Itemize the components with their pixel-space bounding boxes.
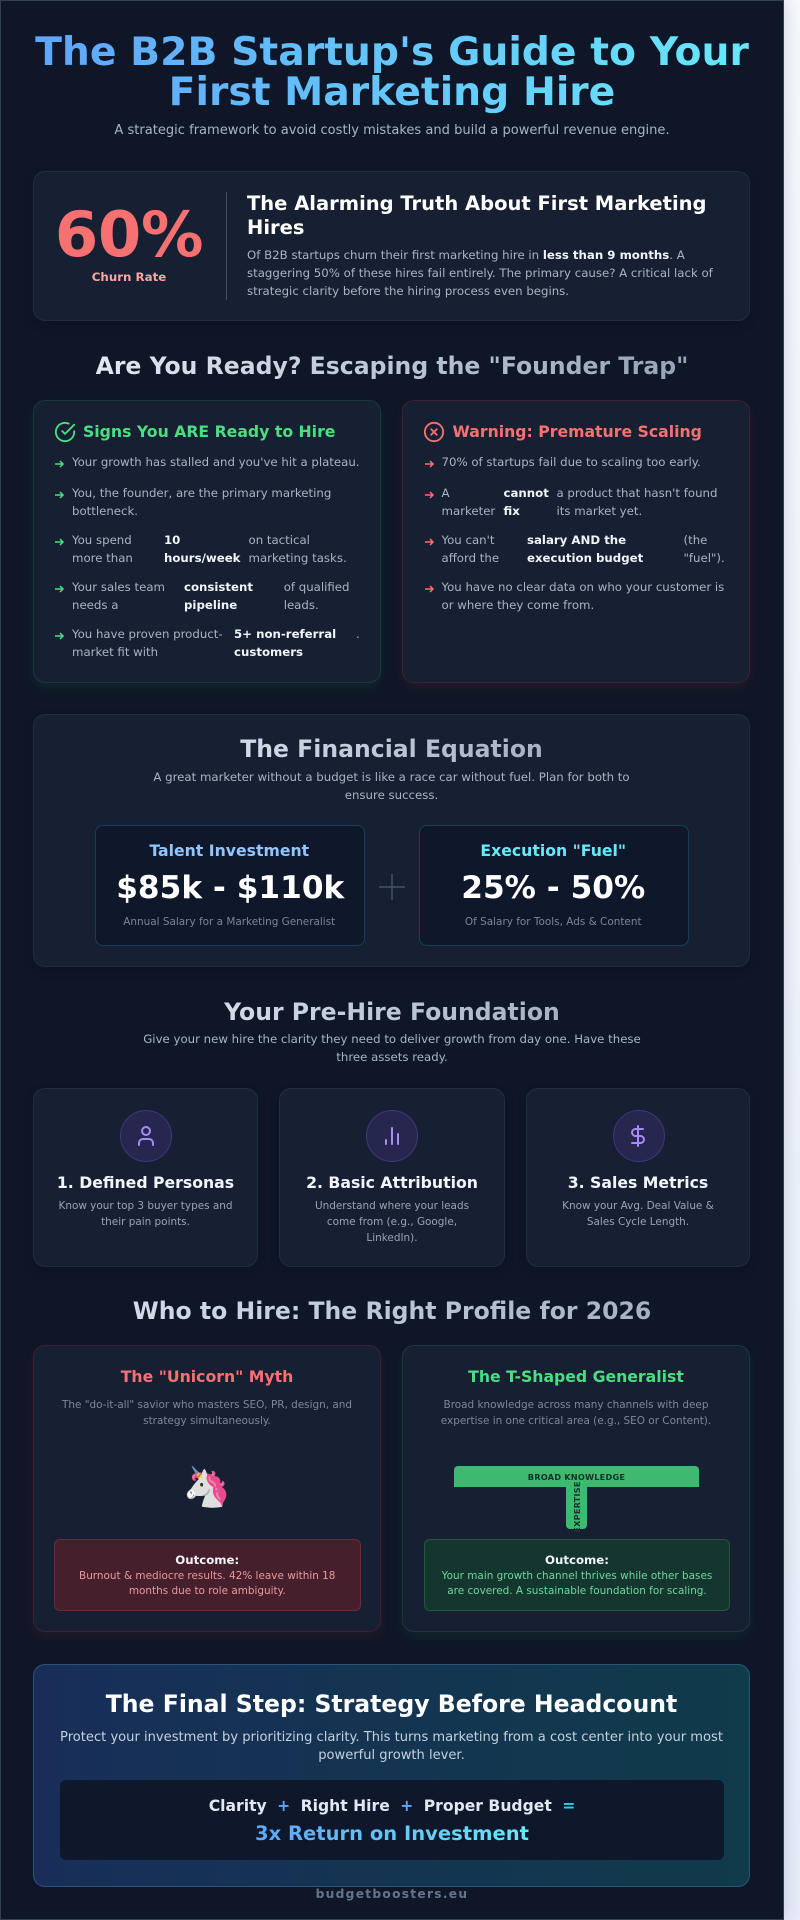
heading: pre-hire foundation: Your Pre-Hire Foundation xyxy=(224,998,560,1026)
list item 4: or where they come from. xyxy=(442,598,594,612)
panel: defined personas xyxy=(33,1088,258,1267)
outcome label: Outcome: xyxy=(545,1553,609,1567)
list item 4: You have no clear data on who your customer is xyxy=(442,580,724,594)
panel: signs you are ready xyxy=(33,400,381,683)
list item 4: Your sales team xyxy=(72,580,165,594)
list item 2: its market yet. xyxy=(556,504,642,518)
heading: The Final Step: Strategy Before Headcount xyxy=(106,1690,677,1718)
description: Know your top 3 buyer types and xyxy=(58,1200,233,1212)
card heading: Signs You ARE Ready to Hire xyxy=(83,422,335,441)
top bar: BROAD KNOWLEDGE xyxy=(528,1472,625,1482)
description: strategy simultaneously. xyxy=(143,1415,271,1427)
list item 2: a product that hasn't found xyxy=(556,486,717,500)
icon: user xyxy=(120,1110,172,1162)
list item 3 xyxy=(425,533,725,565)
body text xyxy=(247,248,713,298)
heading: founder trap: Are You Ready? Escaping the "Founder Trap" xyxy=(96,352,688,380)
subtitle: A strategic framework to avoid costly mistakes and build a powerful revenue engine. xyxy=(114,123,670,138)
title xyxy=(35,30,749,115)
intro text xyxy=(153,770,630,802)
list item 4 xyxy=(55,580,349,612)
outcome label: Outcome: xyxy=(175,1553,239,1567)
heading: The Financial Equation xyxy=(240,734,543,762)
icon: check circle xyxy=(54,422,76,442)
panel: t-shaped generalist xyxy=(402,1345,750,1632)
panel: unicorn myth xyxy=(33,1345,381,1632)
panel: basic attribution xyxy=(279,1088,505,1267)
stem xyxy=(566,1487,587,1529)
heading: who to hire: Who to Hire: The Right Profile for 2026 xyxy=(133,1297,651,1325)
outcome text: Burnout & mediocre results. 42% leave within 18 xyxy=(79,1570,335,1582)
panel: financial equation xyxy=(33,714,750,967)
heading: The Alarming Truth About First Marketing xyxy=(247,192,707,215)
list item 2: cannot xyxy=(504,486,549,500)
list item 3: hours/week xyxy=(164,551,240,565)
card: execution fuel xyxy=(418,825,689,946)
intro text: foundation xyxy=(143,1032,641,1064)
outcome text xyxy=(442,1570,712,1597)
description xyxy=(62,1399,352,1427)
description: Know your Avg. Deal Value & xyxy=(562,1200,714,1212)
icon: dollar xyxy=(612,1110,664,1162)
description: come from (e.g., Google, xyxy=(327,1216,457,1228)
title: The B2B Startup's Guide to Your xyxy=(35,30,749,75)
description: Understand where your leads xyxy=(315,1200,469,1212)
list item 2 xyxy=(55,486,331,518)
list item 3: afford the xyxy=(442,551,499,565)
title: First Marketing Hire xyxy=(169,70,615,115)
card title: Talent Investment xyxy=(149,841,309,860)
caption: Of Salary for Tools, Ads & Content xyxy=(465,916,642,928)
description: their pain points. xyxy=(101,1216,190,1228)
intro text: ensure success. xyxy=(345,788,438,802)
description: expertise in one critical area (e.g., SEO or Content). xyxy=(441,1415,711,1427)
panel: premature scaling warning xyxy=(402,400,750,683)
body text: strategic clarity before the hiring process even begins. xyxy=(247,284,569,298)
heading: Hires xyxy=(247,216,304,239)
amount: $85k - $110k xyxy=(116,870,344,906)
list item 3: marketing tasks. xyxy=(248,551,347,565)
list item 3: You spend xyxy=(72,533,132,547)
list item 4: consistent xyxy=(184,580,253,594)
stat label: Churn Rate xyxy=(92,270,166,284)
body text xyxy=(60,1730,723,1763)
card title: 2. Basic Attribution xyxy=(306,1173,478,1192)
list item 3: 10 xyxy=(164,533,180,547)
list item 2: A xyxy=(442,486,450,500)
body text: Of B2B startups churn their first marketing hire in less than 9 months. A xyxy=(247,248,685,262)
icon: unicorn: 🦄 xyxy=(183,1465,231,1510)
list item 5: You have proven product- xyxy=(72,627,223,641)
description xyxy=(315,1200,469,1244)
list item 3: execution budget xyxy=(527,551,643,565)
card title: Execution "Fuel" xyxy=(480,841,626,860)
result: 3x Return on Investment xyxy=(255,1822,529,1845)
list item 3: You can't xyxy=(442,533,494,547)
list item 4: leads. xyxy=(284,598,319,612)
intro text: foundation: three assets ready. xyxy=(336,1050,448,1064)
list item 1: 70% of startups fail due to scaling too early. xyxy=(442,455,701,469)
card title: 3. Sales Metrics xyxy=(568,1173,708,1192)
list item 2: bottleneck. xyxy=(72,504,138,518)
body text: Protect your investment by prioritizing clarity. This turns marketing from a cost center into your most xyxy=(60,1730,723,1744)
stem label: EXPERTISE xyxy=(572,1481,582,1533)
list item 5: market fit with xyxy=(72,645,158,659)
list item 1: Your growth has stalled and you've hit a plateau. xyxy=(72,455,360,469)
list item 4: of qualified xyxy=(284,580,349,594)
list item 2: fix xyxy=(504,504,520,518)
outcome text: months due to role ambiguity. xyxy=(129,1585,286,1597)
panel: final step xyxy=(33,1664,750,1887)
description: Broad knowledge across many channels with deep xyxy=(444,1399,708,1411)
intro text: A great marketer without a budget is like a race car without fuel. Plan for both to xyxy=(153,770,630,784)
outcome text: are covered. A sustainable foundation for scaling. xyxy=(447,1585,707,1597)
body text: powerful growth lever. xyxy=(318,1748,465,1763)
outcome text: Your main growth channel thrives while other bases xyxy=(442,1570,712,1582)
panel: sales metrics xyxy=(526,1088,750,1267)
list item 3: on tactical xyxy=(248,533,310,547)
list item 3: (the xyxy=(684,533,707,547)
diagram: t-shape xyxy=(454,1466,699,1533)
list item 2 xyxy=(425,486,717,518)
heading xyxy=(247,192,707,239)
icon: plus xyxy=(379,874,405,900)
list item 2: You, the founder, are the primary marketing xyxy=(72,486,331,500)
list item 3: more than xyxy=(72,551,133,565)
description xyxy=(562,1200,714,1228)
icon: bar chart xyxy=(366,1110,418,1162)
footer: budgetboosters.eu xyxy=(316,1887,468,1901)
card title: The "Unicorn" Myth xyxy=(121,1367,293,1386)
list item 5: customers xyxy=(234,645,303,659)
icon: x circle xyxy=(424,422,444,442)
card title: The T-Shaped Generalist xyxy=(468,1367,684,1386)
outcome text xyxy=(79,1570,335,1597)
description: Sales Cycle Length. xyxy=(587,1216,689,1228)
description xyxy=(58,1200,233,1228)
list item 4: pipeline xyxy=(184,598,237,612)
formula: Clarity + Right Hire + Proper Budget = xyxy=(209,1797,575,1815)
top bar xyxy=(454,1466,699,1487)
intro text: foundation: Give your new hire the clarity they need to deliver growth from day one. Have these xyxy=(143,1032,641,1046)
list item 4: needs a xyxy=(72,598,118,612)
big number: 60% xyxy=(55,198,203,271)
list item 2: marketer xyxy=(442,504,495,518)
list item 4 xyxy=(425,580,724,612)
outcome box xyxy=(424,1539,730,1611)
body text: staggering 50% of these hires fail entirely. The primary cause? A critical lack of xyxy=(247,266,713,280)
caption: Annual Salary for a Marketing Generalist xyxy=(123,916,335,928)
description: LinkedIn). xyxy=(366,1232,418,1244)
card title: 1. Defined Personas xyxy=(57,1173,234,1192)
percentage: 25% - 50% xyxy=(461,870,645,906)
list item 3: "fuel"). xyxy=(684,551,725,565)
card: talent investment xyxy=(94,825,365,946)
description: The "do-it-all" savior who masters SEO, PR, design, and xyxy=(62,1399,352,1411)
list item 5 xyxy=(55,627,360,659)
outcome box xyxy=(54,1539,360,1611)
stat: 60% churn xyxy=(55,198,203,284)
list item 3: salary AND the xyxy=(527,533,626,547)
formula box xyxy=(60,1780,724,1860)
list item 3 xyxy=(55,533,347,565)
card heading: Warning: Premature Scaling xyxy=(452,422,702,441)
list item 5: 5+ non-referral xyxy=(234,627,336,641)
list item 5: . xyxy=(356,627,360,641)
description xyxy=(441,1399,711,1427)
panel: alarming truth xyxy=(33,171,750,321)
